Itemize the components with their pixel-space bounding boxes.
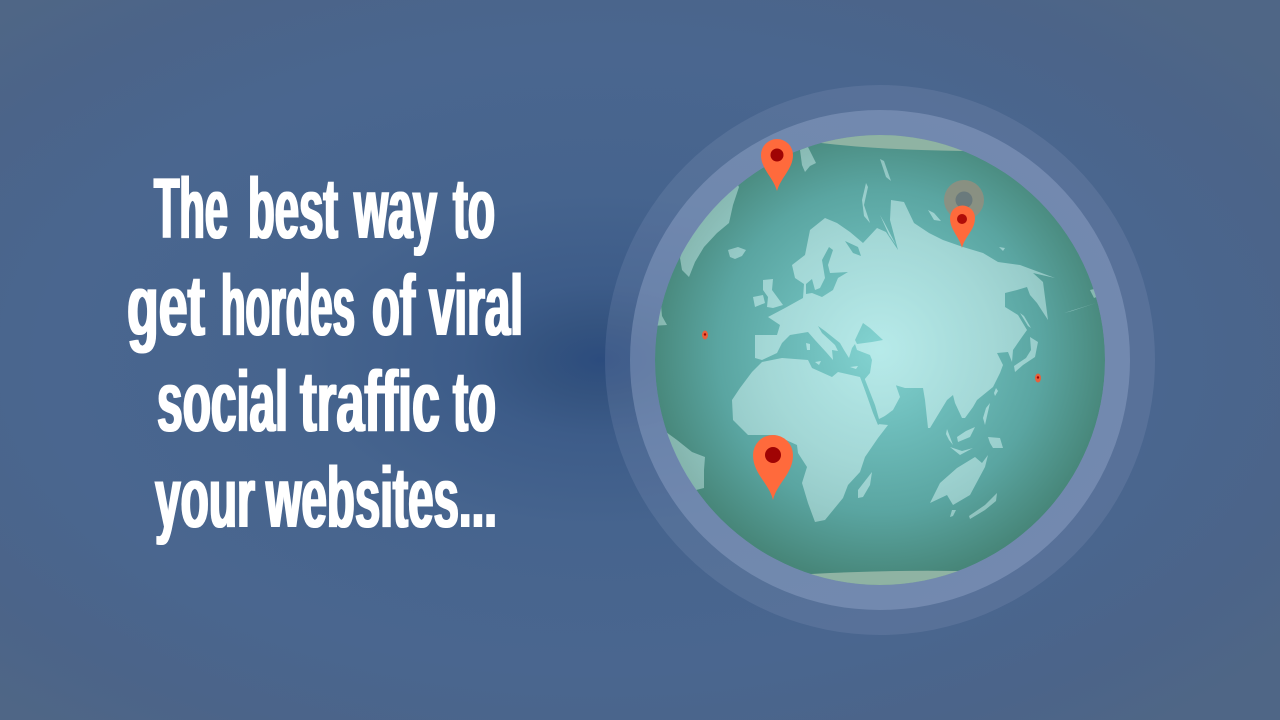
Great Britain [763, 279, 783, 308]
headline: social [157, 354, 288, 450]
Australia [930, 455, 988, 505]
Mediterranean islands [806, 343, 858, 369]
headline: your [155, 450, 255, 546]
arctic islands [880, 210, 1005, 251]
Red Sea and Gulf of Aden [863, 379, 884, 425]
Greenland [680, 186, 739, 277]
map pin: north Atlantic [761, 139, 793, 191]
headline: hordes [221, 258, 355, 354]
headline: best [248, 161, 338, 257]
small pin: Pacific [1035, 374, 1041, 382]
Eurasia [755, 200, 1055, 428]
headline: get [127, 258, 205, 354]
Baltic Sea [806, 247, 848, 297]
New Guinea [988, 437, 1003, 448]
headline [127, 161, 523, 546]
Ireland [753, 295, 765, 307]
headline: websites... [265, 450, 497, 546]
Svalbard [800, 147, 816, 172]
Africa [732, 358, 888, 522]
Japan [1014, 337, 1038, 372]
Madagascar [858, 472, 872, 498]
Iceland [728, 247, 746, 259]
North America edge [658, 307, 667, 326]
map pin: Siberia with pulse [944, 180, 984, 248]
headline: traffic [300, 354, 440, 450]
Philippines [983, 403, 990, 425]
land masses [640, 147, 1099, 522]
headline: viral [429, 258, 523, 354]
headline: way [353, 161, 437, 257]
small pin: Atlantic [702, 330, 708, 340]
Novaya Zemlya [880, 159, 891, 181]
Tasmania [950, 510, 956, 517]
polar caps [811, 125, 964, 595]
headline: of [372, 258, 415, 354]
inland seas [806, 241, 884, 425]
New Zealand [969, 493, 997, 519]
headline: to [453, 161, 495, 257]
map pin: West Africa [753, 435, 793, 500]
globe [640, 125, 1105, 595]
Black Sea [855, 323, 883, 344]
Alaska tip and Aleutians [1065, 289, 1096, 313]
South America [667, 433, 705, 490]
globe halo rings [605, 85, 1155, 635]
White Sea [845, 241, 861, 256]
headline: The [154, 161, 228, 257]
Sumatra and Java [946, 429, 973, 455]
headline: to [453, 354, 496, 450]
Borneo [957, 427, 975, 442]
Taiwan [994, 388, 998, 396]
Sakhalin [1020, 313, 1031, 328]
